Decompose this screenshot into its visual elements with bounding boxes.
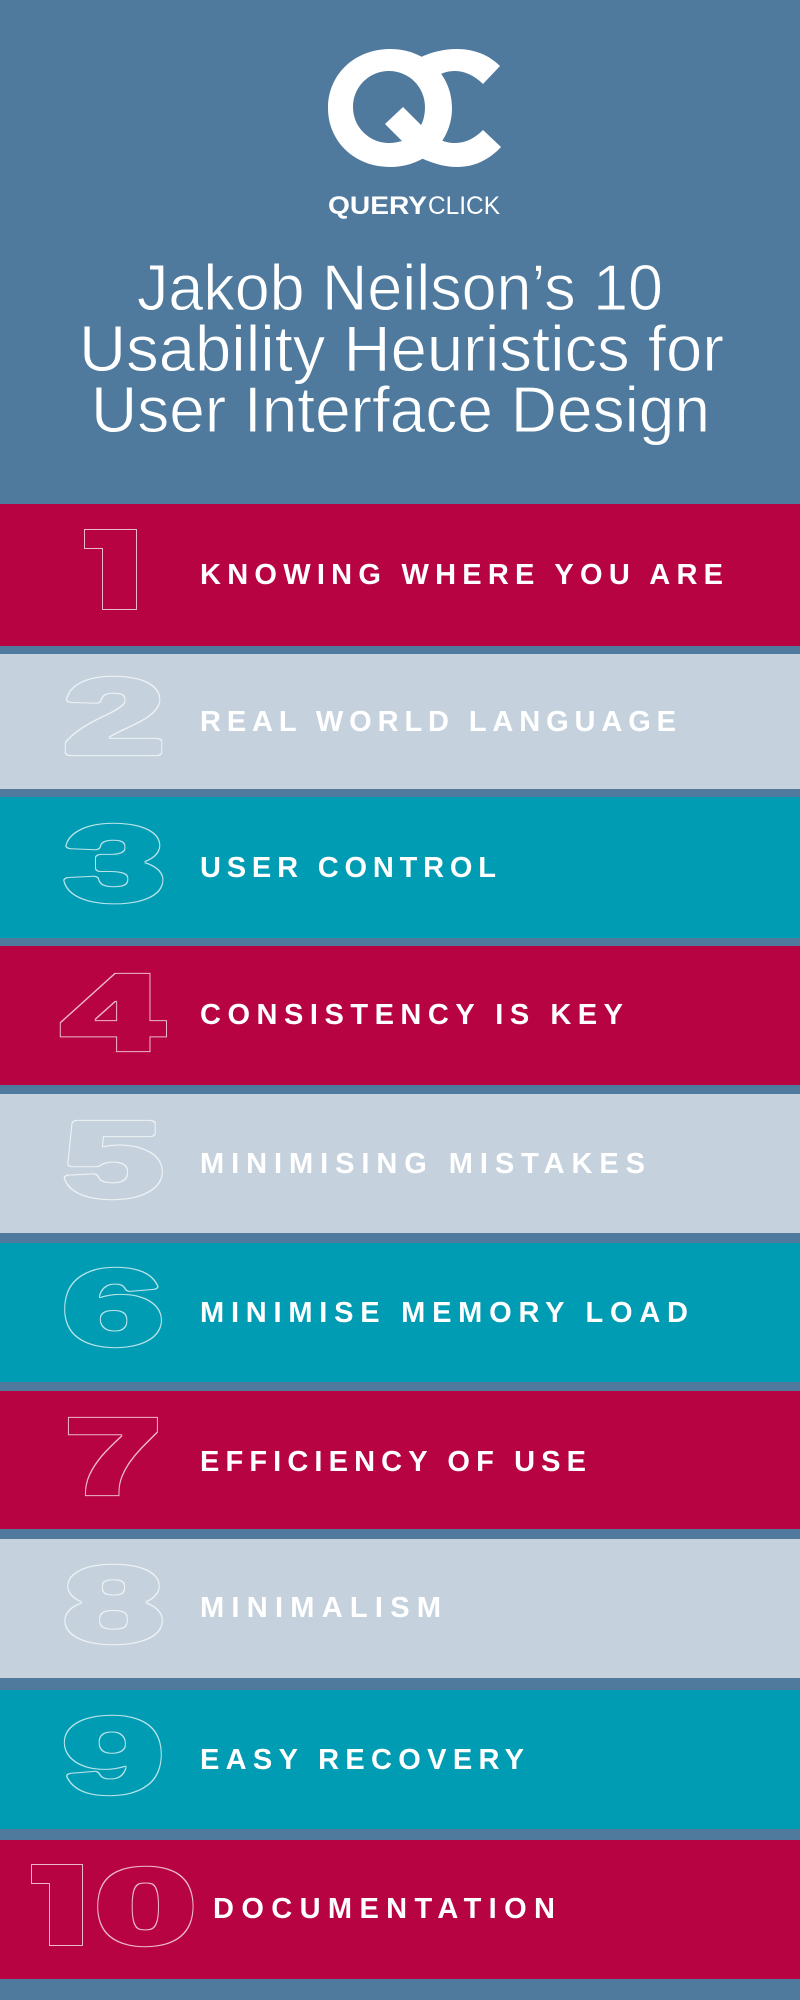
title: Usability Heuristics for (79, 312, 724, 385)
panel: heuristic 3 (0, 797, 800, 938)
logo mark: QC monogram (328, 49, 501, 167)
number 10: 1 (0, 1850, 125, 1965)
panel: heuristic 6 (0, 1243, 800, 1382)
number 9: 9 (63, 1697, 163, 1815)
panel: heuristic 9 (0, 1690, 800, 1829)
number 10 (31, 1864, 194, 1948)
number 2: 2 (64, 658, 164, 776)
number 7: 7 (66, 1398, 160, 1516)
number 4: 4 (62, 954, 163, 1072)
number 5: 5 (64, 1100, 162, 1219)
number 1: 1 (51, 514, 179, 629)
number 3: 3 (64, 805, 165, 923)
panel: heuristic 7 (0, 1391, 800, 1529)
logo wordmark: CLICK (428, 192, 500, 220)
label 8: MINIMALISM (200, 1592, 441, 1624)
label 1: KNOWING WHERE YOU ARE (200, 559, 723, 591)
panel: heuristic 10 (0, 1840, 800, 1979)
panel: heuristic 5 (0, 1094, 800, 1233)
label 3: USER CONTROL (200, 852, 496, 884)
title (79, 251, 724, 446)
panel: heuristic 2 (0, 654, 800, 789)
label 7: EFFICIENCY OF USE (200, 1446, 586, 1478)
title: User Interface Design (91, 373, 710, 446)
label 4: CONSISTENCY IS KEY (200, 999, 623, 1031)
logo wordmark (328, 192, 500, 220)
label 5: MINIMISING MISTAKES (200, 1148, 645, 1180)
logo wordmark: QUERY (328, 192, 427, 220)
panel: heuristic 4 (0, 946, 800, 1085)
number 8: 8 (64, 1545, 163, 1664)
label 10: DOCUMENTATION (213, 1893, 555, 1925)
title: Jakob Neilson’s 10 (137, 251, 663, 324)
number 6: 6 (63, 1249, 163, 1367)
label 9: EASY RECOVERY (200, 1744, 524, 1776)
header logo: QueryClick (328, 49, 501, 220)
label 6: MINIMISE MEMORY LOAD (200, 1297, 688, 1329)
number 1 (84, 529, 137, 610)
label 2: REAL WORLD LANGUAGE (200, 706, 676, 738)
panel: heuristic 8 (0, 1539, 800, 1678)
panel: heuristic 1 (0, 504, 800, 646)
number 10: 0 (95, 1848, 196, 1966)
